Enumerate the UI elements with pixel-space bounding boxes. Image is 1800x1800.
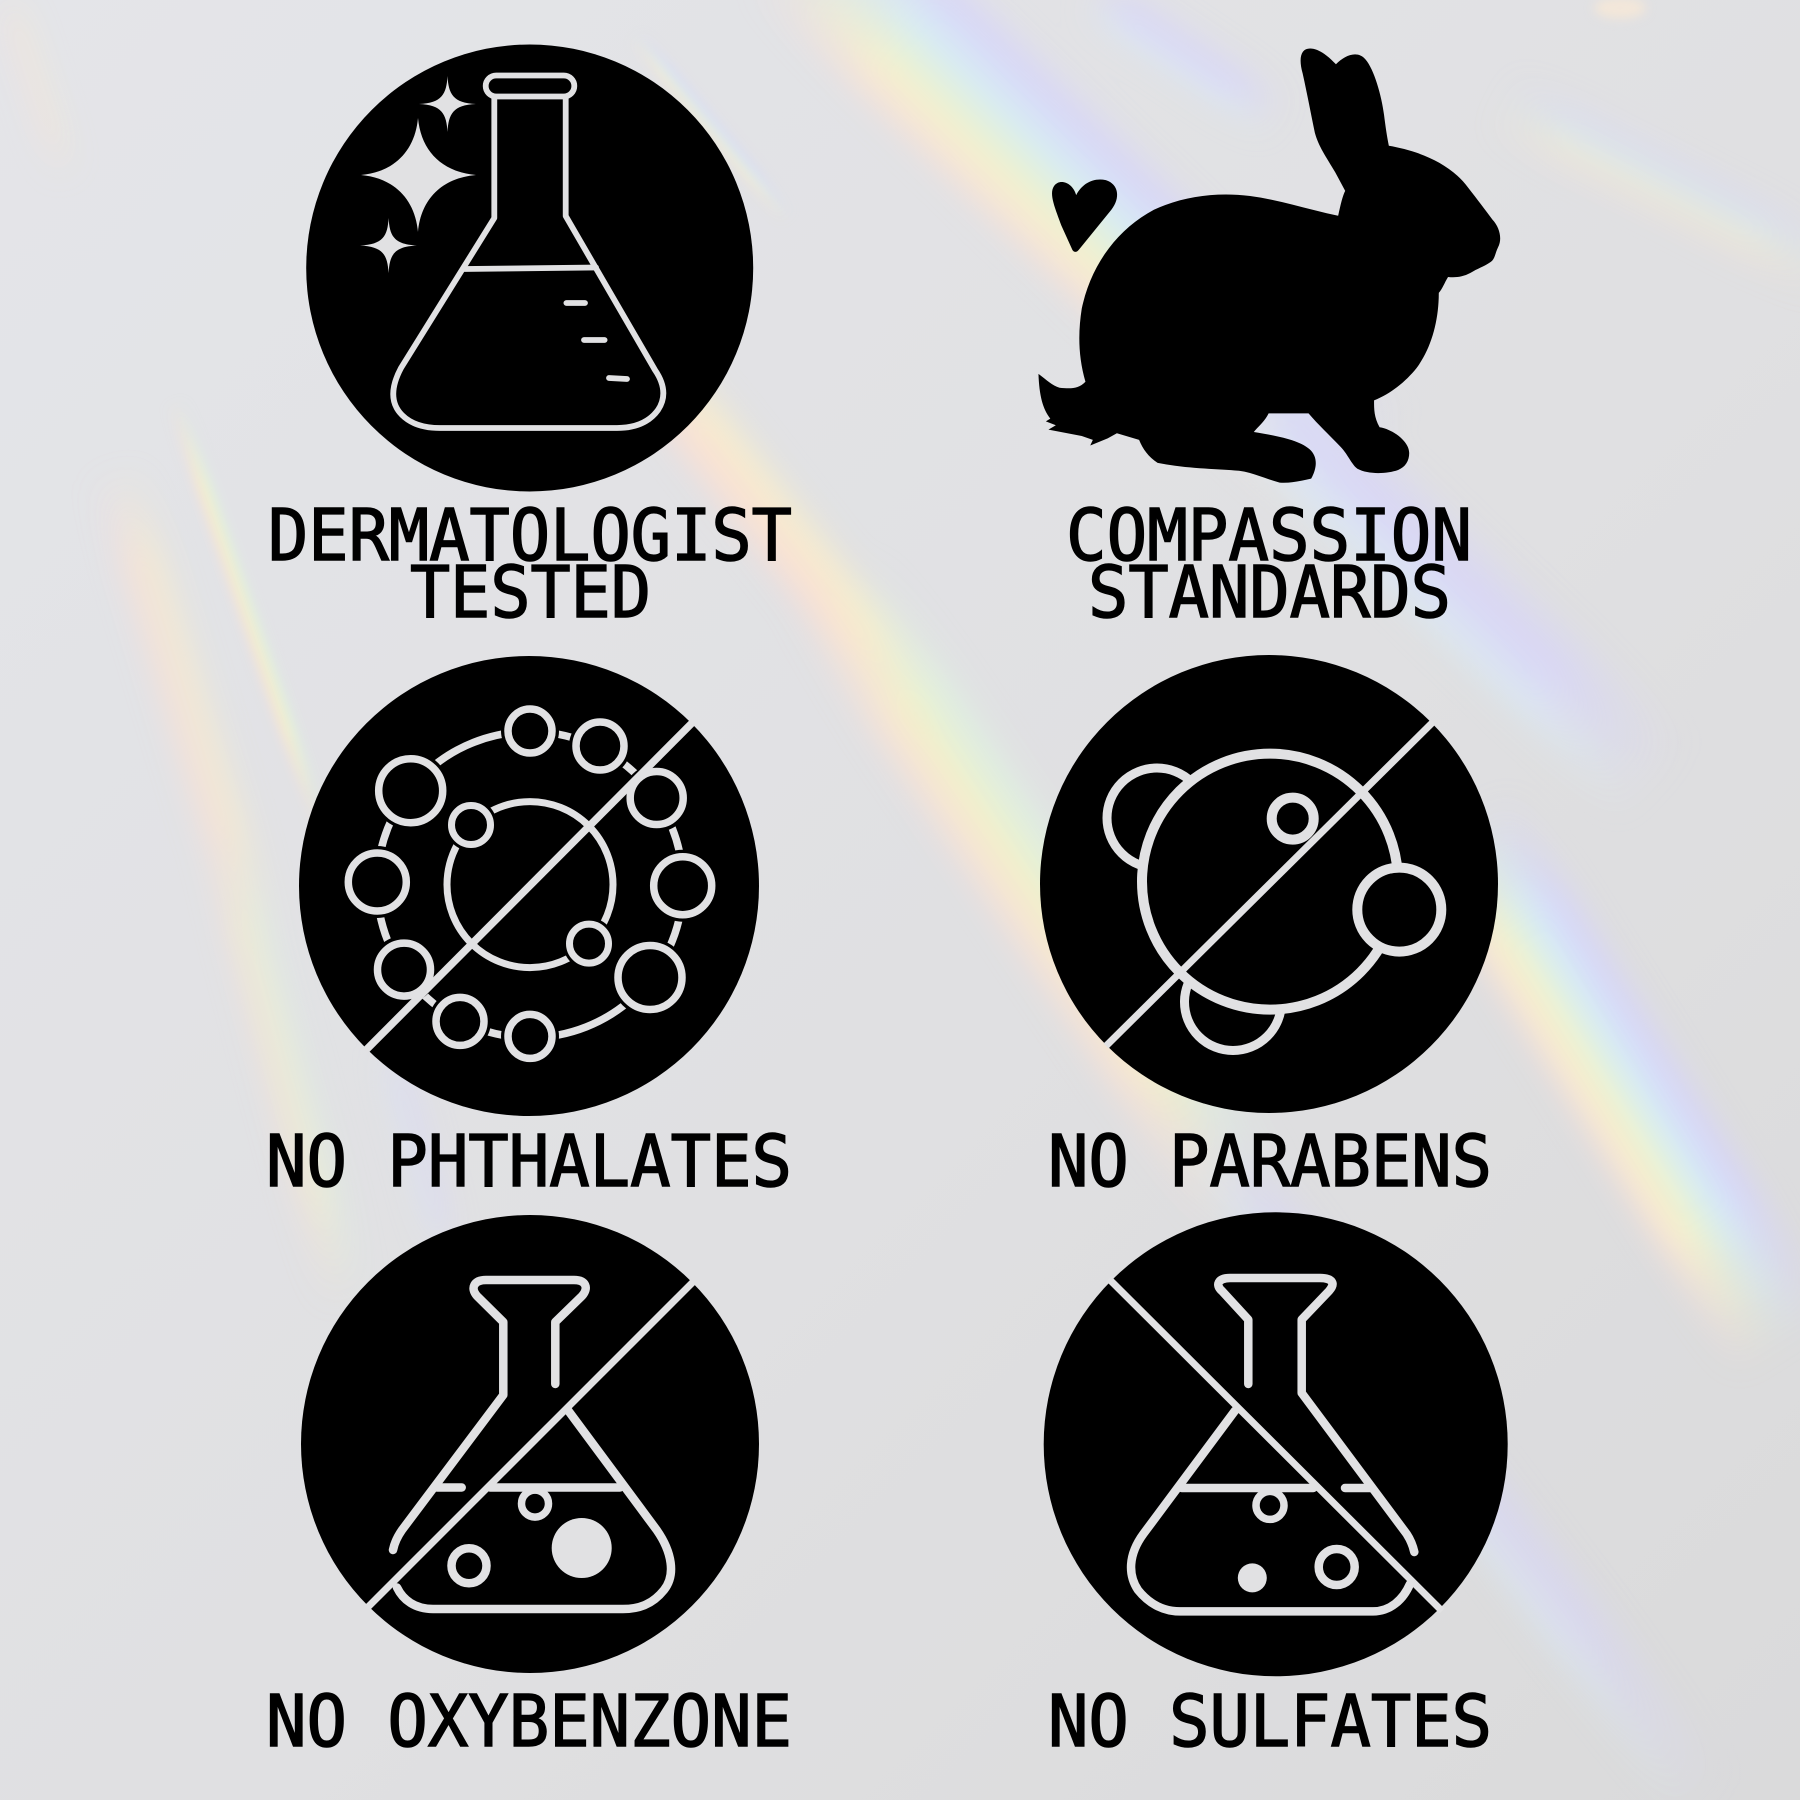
heading: no phthalates: NO PHTHALATES [266, 1120, 792, 1203]
heading: no parabens: NO PARABENS [1048, 1120, 1492, 1203]
icon: flask with bubbles [393, 1280, 671, 1609]
icon: paraben molecule bear shape [1107, 754, 1441, 1050]
icon: black circle badge [1040, 655, 1498, 1113]
panel: no oxybenzone [266, 1215, 792, 1763]
icon: flask with bubbles [1131, 1278, 1414, 1611]
icon: black circle badge [301, 1215, 759, 1673]
heading: no sulfates: NO SULFATES [1048, 1680, 1492, 1763]
icon: conical flask [393, 76, 663, 428]
icon: black circle badge [306, 44, 753, 492]
panel: dermatologist tested [268, 44, 792, 634]
icon: prohibition slash [367, 1282, 693, 1608]
icon: black circle badge [1044, 1212, 1508, 1676]
panel: no parabens [1040, 655, 1498, 1203]
heading: compassion standards [1066, 494, 1472, 634]
heading: dermatologist tested [268, 494, 792, 634]
panel: compassion standards [1038, 48, 1500, 634]
heading: compassion standards: COMPASSION [1066, 494, 1472, 577]
heading: dermatologist tested: TESTED [410, 551, 651, 634]
icon: prohibition slash [1109, 1279, 1442, 1611]
icon: prohibition slash [365, 722, 693, 1051]
icon: large sparkle [361, 118, 476, 232]
panel: no phthalates [266, 656, 792, 1203]
heading: compassion standards: STANDARDS [1088, 551, 1451, 634]
icon: molecule rings [341, 702, 719, 1065]
heading: no oxybenzone: NO OXYBENZONE [266, 1680, 792, 1763]
icon: small sparkle bottom [360, 218, 417, 273]
icon: rabbit silhouette [1038, 48, 1500, 483]
icon: black circle badge [299, 656, 759, 1116]
panel: no sulfates [1044, 1212, 1508, 1763]
icon: prohibition slash [1106, 722, 1433, 1046]
icon: heart [1052, 180, 1117, 252]
icon: small sparkle top [419, 76, 476, 132]
heading: dermatologist tested: DERMATOLOGIST [268, 494, 792, 577]
